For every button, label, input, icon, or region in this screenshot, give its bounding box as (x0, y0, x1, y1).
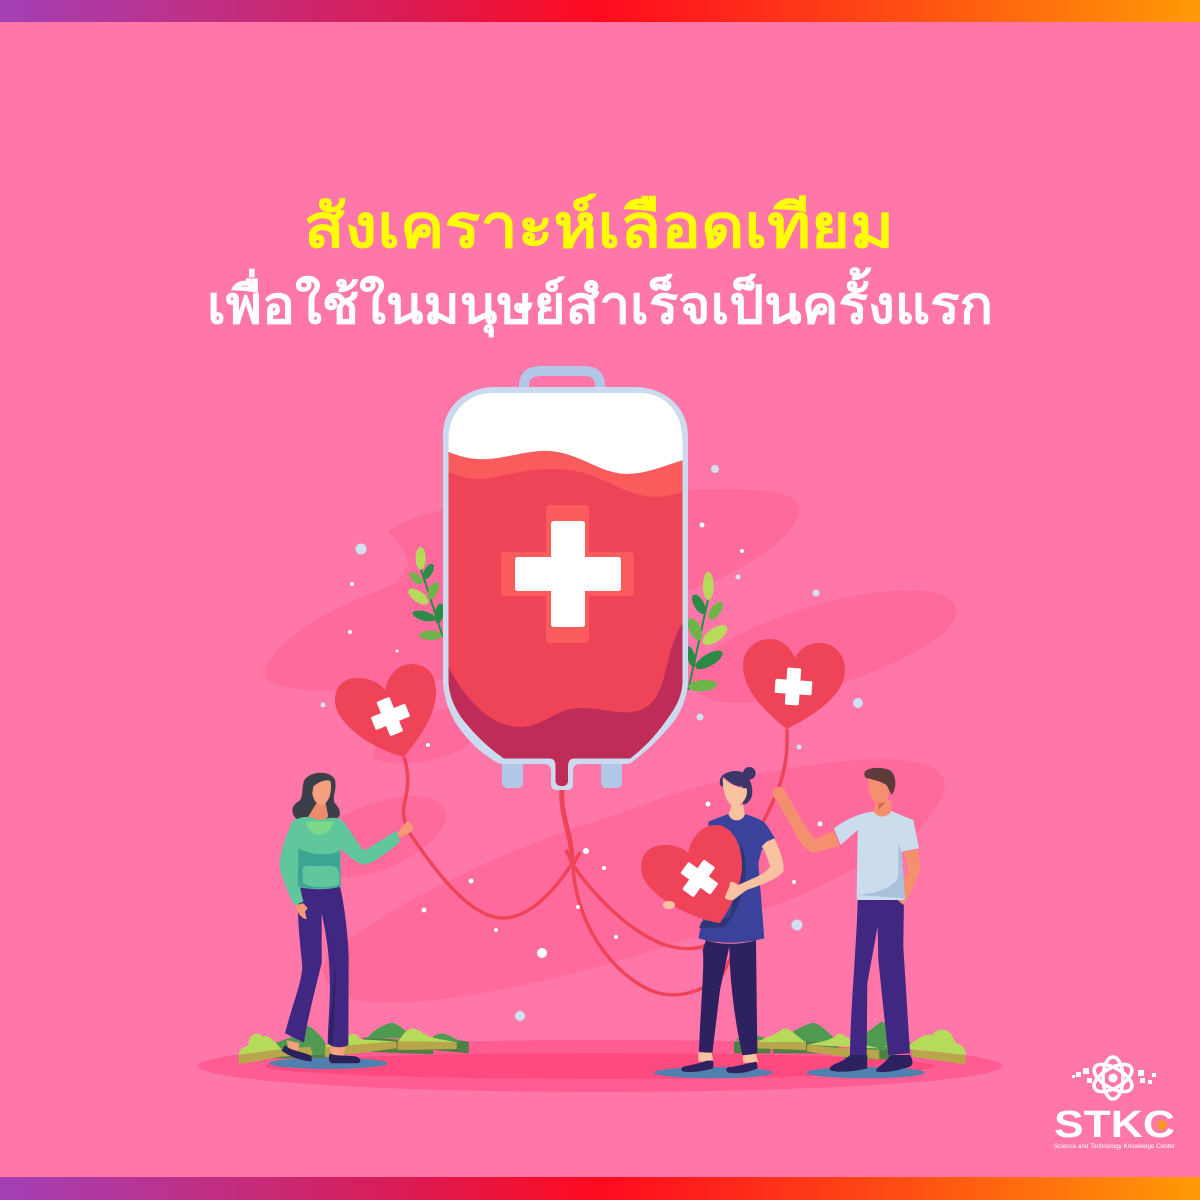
person: woman holding heart (654, 767, 775, 1078)
leaves left (406, 547, 445, 640)
bag handle (524, 371, 600, 392)
logo tagline: Science and Technology Knowledge Center (1054, 1144, 1175, 1150)
logo: STKC (1054, 1057, 1175, 1150)
ground ellipses (198, 1040, 1002, 1092)
logo wordmark: STKC (1054, 1104, 1175, 1146)
logo atom icon (1072, 1057, 1156, 1099)
bag white cross (515, 521, 621, 627)
top gradient bar (0, 0, 1200, 22)
background blobs (265, 489, 956, 1003)
bag cross shadow (501, 505, 634, 643)
title (207, 193, 993, 338)
tube to left balloon (404, 757, 580, 918)
leaves right (684, 572, 731, 693)
floating dots white (348, 522, 822, 958)
main tube (562, 790, 572, 860)
blood bag (440, 371, 690, 795)
tube to center heart (573, 865, 720, 949)
bottom gradient bar (0, 1177, 1200, 1200)
balloon heart right (743, 639, 845, 729)
woman's arm over heart (725, 838, 784, 900)
tube lower loop (573, 865, 735, 995)
title line 2: เพื่อใช้ในมนุษย์สำเร็จเป็นครั้งแรก (207, 267, 993, 338)
bushes right (734, 1022, 966, 1064)
tube to right balloon (763, 729, 787, 822)
bag outer casing (443, 387, 688, 790)
bag contents (448, 393, 682, 786)
balloon heart left (335, 664, 436, 757)
bushes left (239, 1023, 469, 1064)
bag feet (502, 764, 622, 788)
heart held by woman (641, 825, 742, 923)
person: woman with green sweater (269, 773, 413, 1069)
person: man in white shirt (773, 768, 925, 1078)
floating dots pale (320, 465, 863, 1021)
logo orange dot (1157, 1120, 1167, 1130)
title line 1: สังเคราะห์เลือดเทียม (304, 193, 894, 260)
